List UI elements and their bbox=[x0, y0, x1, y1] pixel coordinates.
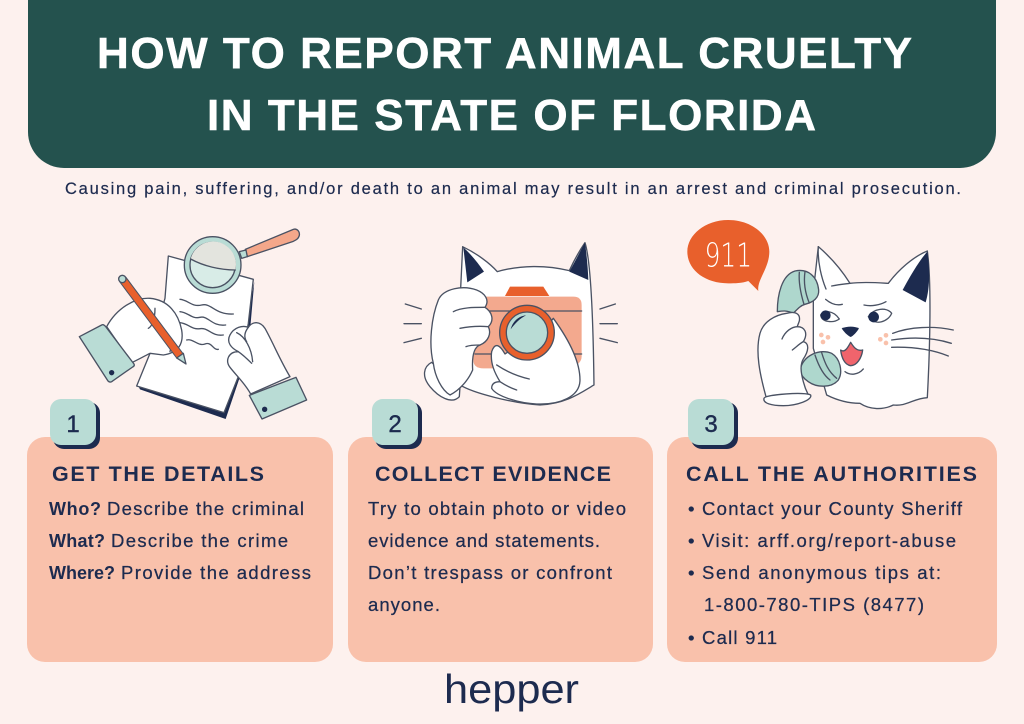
icon: right hand bbox=[228, 323, 307, 419]
step badge 2: 2 bbox=[388, 411, 402, 438]
bulleted list: • bbox=[688, 627, 694, 648]
text block bbox=[368, 498, 626, 615]
callout: 911 speech bubble: 911 bbox=[705, 236, 752, 275]
panel: call the authorities bbox=[667, 399, 997, 662]
callout: 911 speech bubble bbox=[687, 220, 769, 291]
text block: anyone. bbox=[368, 594, 440, 615]
icon: magnifying glass bbox=[184, 229, 299, 293]
subtitle: Causing pain, suffering, and/or death to an animal may result in an arrest and criminal prosecution. bbox=[65, 180, 961, 198]
title: HOW TO REPORT ANIMAL CRUELTY bbox=[97, 29, 912, 78]
icon: telephone handset bbox=[777, 270, 841, 386]
step badge 1 bbox=[50, 399, 100, 449]
bulleted list: • bbox=[688, 530, 694, 551]
panel: get the details bbox=[27, 399, 333, 662]
heading: GET THE DETAILS bbox=[52, 462, 264, 486]
icon: left paw bbox=[425, 288, 529, 400]
heading: CALL THE AUTHORITIES bbox=[686, 462, 977, 486]
text block: evidence and statements. bbox=[368, 530, 600, 551]
illustration: cat calling 911 bbox=[687, 220, 953, 409]
text block bbox=[49, 498, 311, 583]
step badge 3 bbox=[688, 399, 738, 449]
illustration: hands writing on paper with magnifying glass bbox=[79, 229, 307, 419]
step badge 1: 1 bbox=[66, 411, 80, 438]
step badge 2 bbox=[372, 399, 422, 449]
heading: COLLECT EVIDENCE bbox=[375, 462, 611, 486]
icon: camera bbox=[473, 287, 582, 404]
bulleted list: Call 911 bbox=[702, 627, 777, 648]
bulleted list: 1-800-780-TIPS (8477) bbox=[704, 594, 924, 615]
bulleted list: • bbox=[688, 562, 694, 583]
bulleted list: • bbox=[688, 498, 694, 519]
step badge 3: 3 bbox=[704, 411, 718, 438]
text block: Describe the crime bbox=[111, 530, 288, 551]
text block: Describe the criminal bbox=[107, 498, 304, 519]
logo: hepper: hepper bbox=[444, 666, 579, 712]
bulleted list: Send anonymous tips at: bbox=[702, 562, 941, 583]
bulleted list: Visit: arff.org/report-abuse bbox=[702, 530, 956, 551]
bulleted list: Contact your County Sheriff bbox=[702, 498, 963, 519]
icon: left hand with pencil bbox=[79, 275, 186, 382]
icon: flash lines bbox=[404, 304, 617, 343]
title: IN THE STATE OF FLORIDA bbox=[207, 91, 816, 140]
text block: Try to obtain photo or video bbox=[368, 498, 626, 519]
text block: Don’t trespass or confront bbox=[368, 562, 612, 583]
cat face bbox=[819, 299, 953, 374]
icon: right paw bbox=[491, 318, 580, 404]
title bbox=[97, 29, 912, 140]
illustration: cat holding camera bbox=[404, 243, 617, 405]
text block: Where? bbox=[49, 563, 115, 583]
panel: collect evidence bbox=[348, 399, 653, 662]
icon: paw holding phone bbox=[758, 312, 811, 406]
bulleted list bbox=[688, 498, 963, 648]
title banner bbox=[28, 0, 996, 168]
text block: What? bbox=[49, 531, 105, 551]
text block: Provide the address bbox=[121, 562, 311, 583]
text block: Who? bbox=[49, 499, 101, 519]
